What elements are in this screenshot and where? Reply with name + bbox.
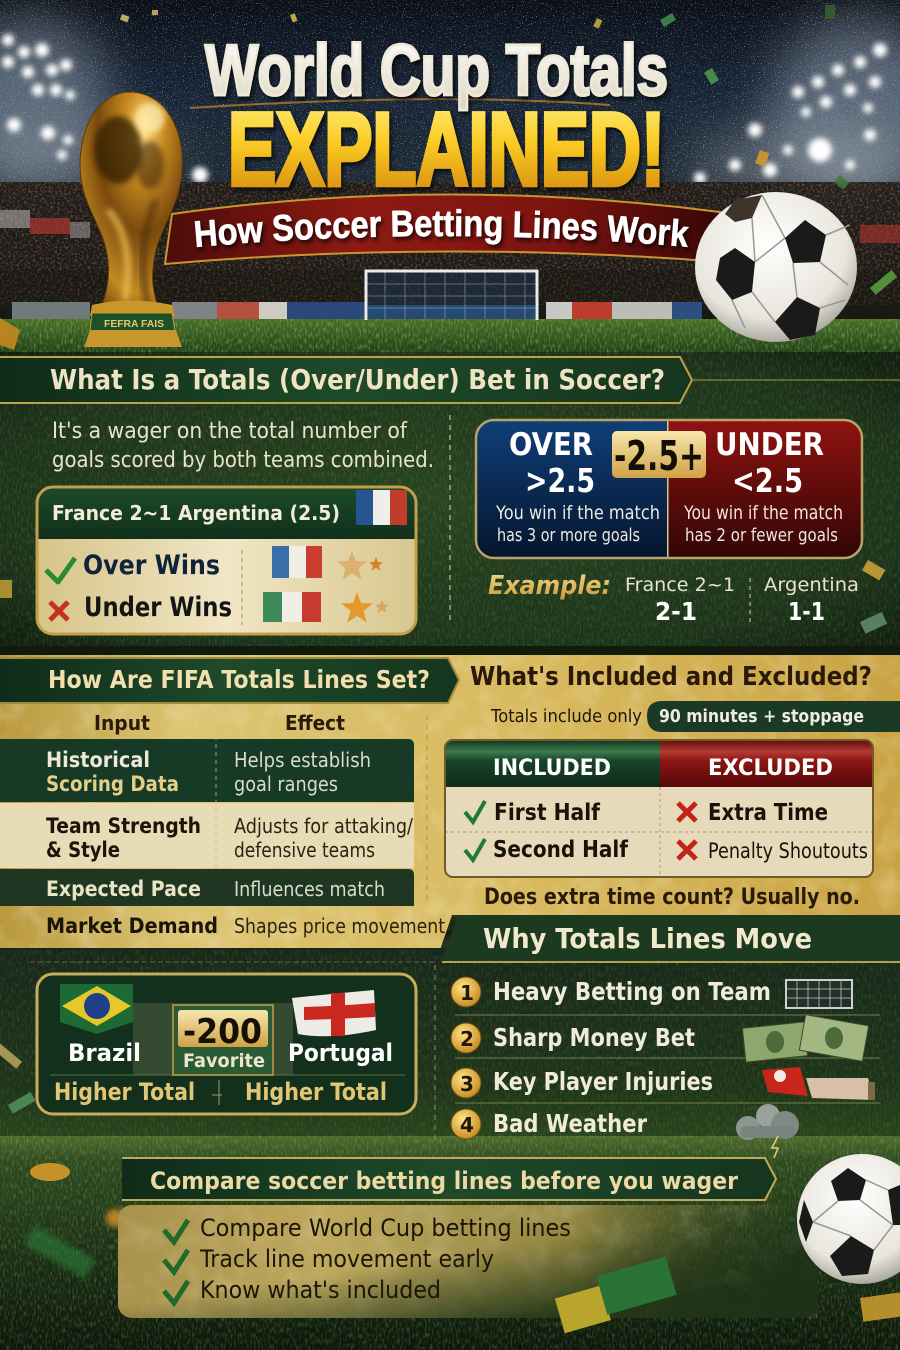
pill (647, 701, 900, 732)
row: historical: Helps establish (234, 748, 371, 772)
icon: stars under (341, 592, 389, 622)
over column: has 3 or more goals (497, 525, 640, 546)
list: reasons lines move (451, 977, 880, 1158)
under wins label: Under Wins (84, 592, 232, 623)
example: 2-1 (655, 597, 697, 626)
excluded item 1: Extra Time (708, 800, 828, 826)
title line 2: EXPLAINED! (228, 92, 665, 208)
item 2: Sharp Money Bet (493, 1023, 695, 1052)
item 4 (451, 1104, 799, 1158)
panel: over under (476, 420, 862, 558)
table: lines inputs (0, 711, 445, 938)
intro text: It's a wager on the total number of (52, 419, 408, 444)
heading text: Compare soccer betting lines before you wager (150, 1167, 738, 1195)
excluded item 2: Penalty Shoutouts (708, 839, 868, 863)
subtitle text: How Soccer Betting Lines Work (194, 208, 691, 252)
item 1: Heavy Betting on Team (493, 977, 771, 1006)
odds badge: -200 (183, 1012, 262, 1052)
over column: OVER (509, 427, 593, 463)
example: 1-1 (788, 597, 825, 626)
higher total left: Higher Total (54, 1078, 195, 1106)
background: stadium (0, 0, 900, 320)
over wins label: Over Wins (83, 550, 220, 581)
icon: Brazil flag (60, 984, 133, 1034)
row: expected pace: Expected Pace (46, 877, 201, 901)
heading text: What Is a Totals (Over/Under) Bet in Soccer? (50, 363, 665, 396)
icon: trophy (80, 92, 182, 347)
note: totals include: Totals include only (490, 706, 642, 727)
trophy base engraving: FEFRA FAIS (104, 319, 164, 330)
section heading: why lines move (442, 915, 900, 962)
under column: <2.5 (732, 461, 803, 500)
example: Example: (488, 571, 611, 601)
icon: stars over (337, 551, 383, 580)
note: totals include: 90 minutes + stoppage (659, 706, 864, 727)
subtitle ribbon (164, 194, 721, 266)
background: sections (0, 352, 900, 1350)
icon: check (46, 558, 75, 582)
intro text: goals scored by both teams combined. (52, 448, 434, 473)
row: historical: Scoring Data (46, 772, 179, 796)
section heading: what is a totals bet (0, 357, 900, 403)
item 3: 3 (460, 1072, 474, 1096)
excluded header: EXCLUDED (708, 756, 833, 781)
title line 1: World Cup Totals (205, 31, 668, 111)
row: expected pace (0, 869, 414, 906)
panel: included excluded (445, 740, 873, 877)
item 3: Key Player Injuries (493, 1067, 713, 1096)
included item 1: First Half (494, 800, 601, 826)
row: team strength: Team Strength (46, 814, 201, 838)
table head: Effect (285, 711, 345, 735)
example (488, 571, 859, 626)
example: Argentina (764, 574, 859, 596)
goal (366, 271, 537, 320)
heading text: How Are FIFA Totals Lines Set? (48, 665, 430, 694)
item 1: 1 (460, 981, 474, 1005)
row: market demand (46, 914, 445, 938)
panel: match card (37, 487, 416, 634)
note: totals include (490, 701, 900, 732)
row: historical: goal ranges (234, 772, 338, 796)
row: team strength: Adjusts for attaking/ (234, 814, 413, 838)
item 4: Bad Weather (493, 1109, 648, 1138)
over column (495, 427, 660, 546)
under column: You win if the match (683, 502, 843, 524)
item 3: Know what's included (200, 1276, 441, 1304)
section heading: how lines set (0, 658, 459, 703)
item 1: Compare World Cup betting lines (200, 1214, 571, 1242)
intro text (52, 419, 434, 473)
ribbon confetti: green yellow (552, 1256, 678, 1333)
item 2: Track line movement early (199, 1245, 494, 1273)
odds badge: Favorite (183, 1050, 265, 1072)
Brazil label: Brazil (68, 1039, 141, 1067)
Portugal label: Portugal (288, 1039, 393, 1067)
gold divider sparkle (190, 99, 610, 108)
item 3 (451, 1067, 875, 1100)
odds badge (173, 1005, 273, 1075)
under column: UNDER (715, 427, 824, 463)
under column (683, 427, 843, 546)
table head: Input (94, 711, 150, 735)
heading text: Why Totals Lines Move (483, 922, 812, 955)
icon: soccer ball (695, 192, 857, 342)
section heading: compare lines (122, 1158, 776, 1200)
row: team strength (0, 803, 414, 868)
row: historical: Historical (46, 748, 150, 772)
item 2 (451, 1015, 869, 1062)
under column: has 2 or fewer goals (685, 525, 838, 546)
item 2: 2 (460, 1027, 474, 1051)
icon: storm cloud (736, 1104, 799, 1158)
row: expected pace: Influences match (234, 877, 385, 901)
higher total right: Higher Total (245, 1078, 387, 1106)
icon: England flag (292, 990, 376, 1036)
row: team strength: & Style (46, 838, 120, 862)
icon: flag under (263, 592, 321, 622)
line badge: -2.5+ (614, 432, 704, 480)
row: market demand: Market Demand (46, 914, 218, 938)
icon: second soccer ball (797, 1154, 900, 1284)
icon: goal net (786, 980, 852, 1008)
included header: INCLUDED (493, 756, 611, 781)
icon: flag France (356, 490, 407, 525)
icon: cross (50, 602, 68, 620)
panel: checklist (118, 1205, 818, 1318)
over column: You win if the match (495, 502, 660, 524)
row: team strength: defensive teams (234, 838, 375, 862)
icon: money (742, 1015, 869, 1062)
panel: team comparison (37, 974, 416, 1114)
included item 2: Second Half (493, 837, 629, 863)
over column: >2.5 (525, 461, 595, 500)
pitch strip (0, 319, 900, 354)
table head (94, 711, 345, 735)
icon: flag over (272, 546, 322, 578)
item 4: 4 (460, 1113, 474, 1137)
row: historical (0, 739, 414, 802)
title (190, 31, 668, 208)
example: France 2~1 (625, 574, 735, 596)
icon: injury (762, 1067, 875, 1100)
match title: France 2~1 Argentina (2.5) (52, 501, 340, 525)
row: market demand: Shapes price movement (234, 914, 445, 938)
